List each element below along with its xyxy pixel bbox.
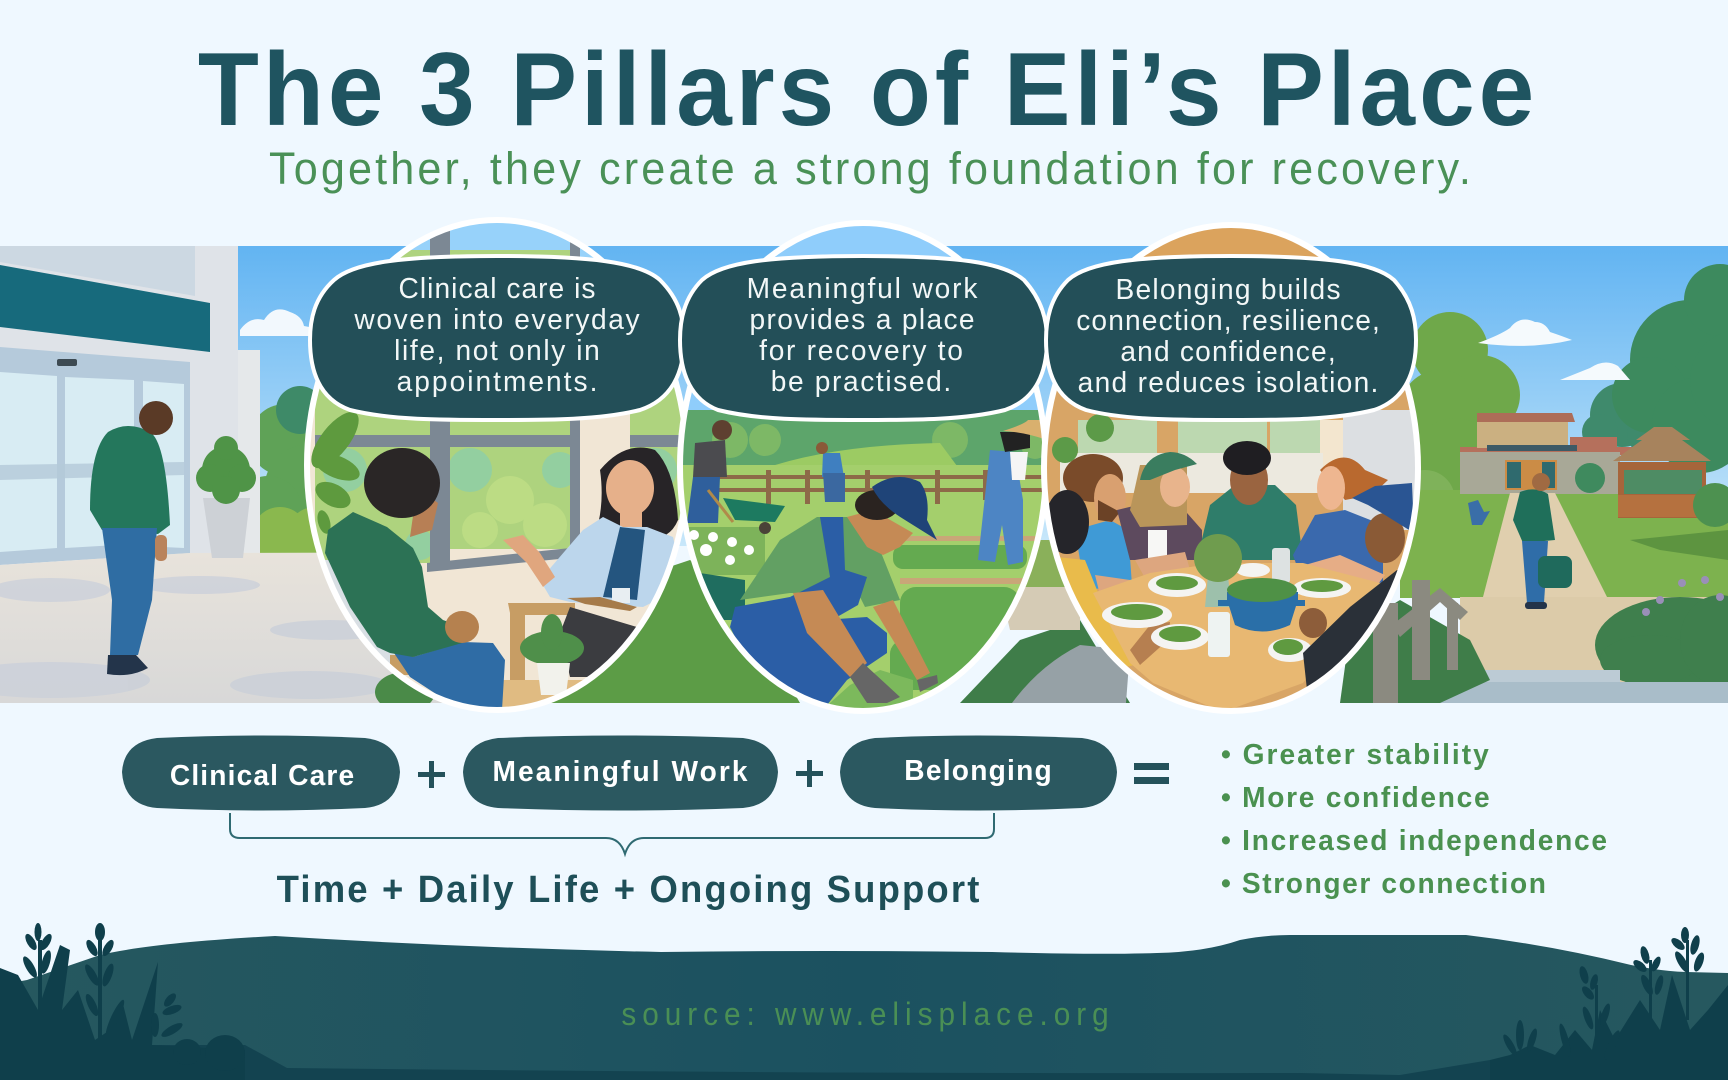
returning man: hoodie [1513,489,1555,543]
callout text: life, not only in [394,335,600,367]
background man: shirt [693,440,727,477]
clinician: coat [540,517,677,607]
lawn shade [1630,530,1728,560]
scene: gap between panels with greenery [500,540,1130,703]
cap man: hoodie [1303,570,1420,690]
distant worker head [816,442,828,454]
lavender sprigs [1642,576,1724,616]
ground rounds [173,1035,245,1071]
teal sign band [0,265,210,352]
right wood chair [508,603,575,680]
ceiling wood [1040,225,1430,265]
gazebo body [1618,462,1706,518]
rake handle [708,490,733,522]
field [670,465,1060,715]
salads [1111,576,1343,655]
gardener: hair [855,490,899,520]
upper wall [0,246,238,560]
flowers [689,530,754,565]
upper cladding [0,246,195,296]
small tree [1582,384,1646,447]
clinician: ID badge [612,588,630,603]
ferns beneath fence [1340,600,1490,703]
woman cap: cap [1140,452,1197,480]
woman cap: plaid shirt [1117,502,1202,560]
window plant [1052,414,1114,463]
callout text: Belonging builds [1115,274,1341,306]
outcomes list: • Increased independence [1221,825,1607,857]
callout text: connection, resilience, [1076,305,1380,337]
annex wall [238,350,260,555]
background man: jeans [687,477,720,523]
vegetable rows [890,545,1027,690]
clouds [1478,320,1630,380]
right gap grass [960,620,1130,703]
callout: belonging [1046,256,1416,420]
planter [203,498,250,558]
window panes [315,250,690,563]
callout text: and reduces isolation. [1078,367,1378,399]
woman cap: white top [1148,530,1167,560]
foliage behind clinic [260,386,316,553]
cap man: hand [1299,608,1327,638]
gardener: shirt [740,517,900,607]
source line: source: www.elisplace.org [621,996,1109,1032]
window panes [1078,420,1320,453]
walking man: shoes [107,655,148,675]
woman cap: face [1160,467,1190,507]
small plant [520,614,584,665]
man: hair [1063,454,1123,502]
lodge glass [1507,462,1555,488]
plus sign [796,760,823,787]
left tree [1410,312,1520,490]
patient: hoodie [325,512,462,657]
bouquet [1194,534,1242,582]
right woman: overalls [978,450,1023,565]
gardener: bib and straps [790,517,867,625]
right woman: hair [1000,432,1030,452]
plant bed [1595,595,1728,693]
distant worker shirt [822,453,844,477]
window frames [315,220,690,572]
pill: clinical care [122,736,400,810]
window lime foliage [462,476,567,548]
flower bed [680,527,765,575]
callout text: for recovery to [759,335,963,367]
patient: hands [445,611,479,643]
planter shrub [196,436,256,504]
clipboard [567,597,637,611]
left sprig A [21,923,54,1030]
right woman: forearm [1305,555,1385,588]
lawn [1400,490,1728,598]
gardener: far arm [873,600,930,680]
tree line [670,410,1060,480]
lodge roof [1477,413,1575,422]
bracket [230,813,994,854]
center man: hair [1223,441,1271,475]
returning man: jeans [1522,541,1548,603]
fence [700,470,1060,504]
callout text [747,273,978,398]
door sensor [57,359,77,366]
stone steps [1450,670,1620,682]
shadows on ground [0,576,390,699]
door frame and glass [0,347,190,565]
right woman: face [1317,466,1345,510]
outcomes list: • More confidence [1221,782,1490,814]
panel: meaningful work scene [670,220,1060,715]
plant pot [537,663,570,695]
center man: face [1230,455,1268,505]
gazebo openings [1624,470,1702,494]
panel ring [680,223,1046,711]
returning man: shoes [1525,602,1547,609]
white clouds [240,309,309,336]
lower gravel pavement [1460,597,1728,703]
sky [670,220,1060,420]
clinician: arm and hand [503,535,555,587]
plates [1102,563,1351,662]
walking man: hand [155,535,167,561]
stone step lower [1370,682,1728,703]
left sprig C [151,991,184,1039]
pill: clinical care: Clinical Care [170,760,354,792]
callout text: appointments. [397,366,597,398]
clinician: hair [595,448,678,540]
shrub by gazebo [1693,483,1728,527]
woman cap: hair [1130,465,1187,527]
table [1093,563,1380,712]
cap man: head [1365,513,1405,563]
patient: jeans [392,642,505,710]
right woman: shirt [1010,452,1028,480]
right ground mass [1490,975,1728,1080]
left concrete outside [300,560,410,715]
gardener: near arm [793,590,867,677]
water glass [1208,612,1230,657]
tree clusters [712,422,1049,459]
clinician: face [606,460,654,516]
woman cap: forearm [1135,552,1190,578]
callout: clinical care [310,256,684,420]
flower vase [1205,575,1231,607]
scene: retreat grounds departure [1340,264,1728,703]
cap man: cap [1352,483,1414,533]
scene: sky backdrop [238,246,1728,546]
water bottle [1272,548,1290,583]
right woman: hoodie [1293,510,1383,583]
right sprig B [1631,945,1665,1030]
gardener: jeans [730,597,887,705]
man: forearm [1095,575,1140,600]
sky above window [300,220,700,280]
lodge stone base [1460,452,1620,494]
plant at path edge [375,674,433,703]
footer landscape [0,923,1728,1080]
panel ring [1044,225,1418,711]
panel: clinical care scene [300,220,700,715]
right woman: hat [1003,420,1047,440]
gravel path [1483,493,1607,597]
time and support caption: Time + Daily Life + Ongoing Support [277,867,979,910]
background man: head [712,420,732,440]
gardener: gloves [850,663,938,703]
lodge [1460,413,1650,494]
right sprig C [1578,965,1622,1061]
left ground mass [0,945,245,1080]
log rail [1373,580,1468,703]
outcomes list [1221,739,1607,900]
low table [502,680,590,715]
trees backdrop [1410,264,1728,490]
left leaf plant [303,405,367,535]
lodge porch beam [1487,445,1577,451]
gazebo [1613,427,1711,518]
callout text: be practised. [771,366,951,398]
man: face and beard [1094,474,1126,522]
shrub near lodge [1575,463,1605,493]
lodge upper wall [1477,420,1568,448]
footer hill [0,935,1728,1080]
large right tree [1612,264,1728,473]
illustration band [0,246,1728,712]
distant worker jeans [823,473,845,502]
window foliage [323,448,677,560]
room wall [300,220,700,715]
right plants [1490,927,1728,1080]
clinician: trousers [560,607,637,677]
left sprig B [83,923,127,1045]
lodge door [1505,460,1557,490]
green crates [700,573,745,620]
counter [1060,453,1323,493]
blue bench [1468,500,1490,525]
title: The 3 Pillars of Eli’s Place [198,31,1534,147]
center man: hoodie [1197,485,1303,560]
left front person: yellow jacket [1057,557,1135,667]
outcomes list: • Greater stability [1221,739,1489,771]
left front person: head [1045,490,1089,554]
fridge [1343,410,1423,530]
interior band [0,462,184,480]
clinician: inner top [603,527,645,600]
pill: belonging: Belonging [904,755,1052,787]
gardener: neck and face [847,510,913,555]
plus sign [418,761,445,788]
callout text: Clinical care is [399,273,595,305]
outcomes list: • Stronger connection [1221,868,1546,900]
walkway gap [1000,587,1080,630]
patient: face [410,488,438,537]
kitchen wall [1040,225,1430,715]
gardener: cap [872,477,937,540]
panel ring [307,220,687,710]
walking man: hoodie [90,426,170,534]
callout text: woven into everyday [353,304,640,336]
footer lower band [0,1045,1728,1080]
man: beard [1098,500,1120,522]
callout: meaningful work [680,256,1047,420]
man: blue shirt [1075,520,1132,590]
callout text [353,273,640,398]
walking man: jeans [102,528,157,655]
lodge side roof [1460,437,1650,455]
blue pot [1218,592,1305,632]
patient seat [390,655,417,675]
pill: meaningful work [463,736,778,810]
patient: hair [364,448,440,518]
right gap lawn [1026,540,1065,587]
equals sign [1134,763,1169,784]
returning man: head [1532,473,1550,491]
clinician: neck [620,510,642,532]
callout text: and confidence, [1120,336,1336,368]
meadow hills [760,443,960,470]
returning man: bag [1538,556,1572,588]
gazebo roof [1613,427,1711,461]
walking man: head [139,401,173,435]
callout text: provides a place [749,304,975,336]
right cream wall [1320,420,1343,480]
concrete ground [0,552,442,703]
left front person: forearm [1130,622,1170,665]
wheelbarrow [723,498,785,522]
right low blades [1501,1020,1573,1057]
callout text: Meaningful work [747,273,978,305]
right woman: hair [1320,458,1388,500]
left plants [0,923,245,1080]
gazebo rail [1618,495,1706,517]
grass bed between panels [552,560,800,703]
pill: meaningful work: Meaningful Work [492,756,748,788]
lettuce in hands [830,670,913,715]
subtitle: Together, they create a strong foundation for recovery. [269,144,1471,194]
wheelbarrow wheel [759,522,771,534]
callout text [1076,274,1380,399]
panel: belonging scene [1040,225,1430,715]
soil stripes [900,536,1040,584]
pill: belonging [840,736,1117,810]
pot food [1227,578,1297,602]
right sprig A [1669,927,1706,1020]
scene: clinic building arrival [0,246,442,703]
log fence [1012,645,1130,703]
